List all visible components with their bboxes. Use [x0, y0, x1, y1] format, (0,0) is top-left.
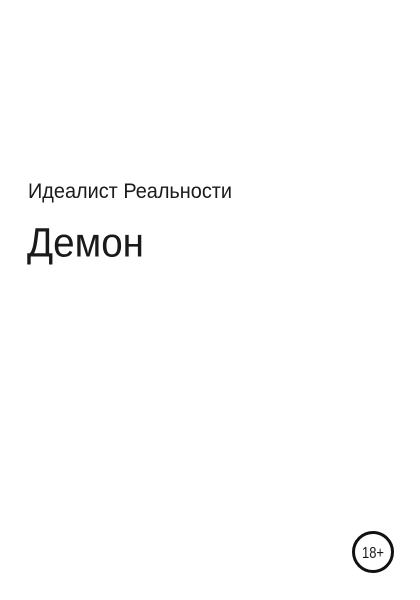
age rating badge	[354, 532, 392, 572]
book title: Демон	[27, 220, 144, 266]
author name: Идеалист Реальности	[28, 180, 232, 203]
age rating badge: 18+	[362, 545, 384, 562]
